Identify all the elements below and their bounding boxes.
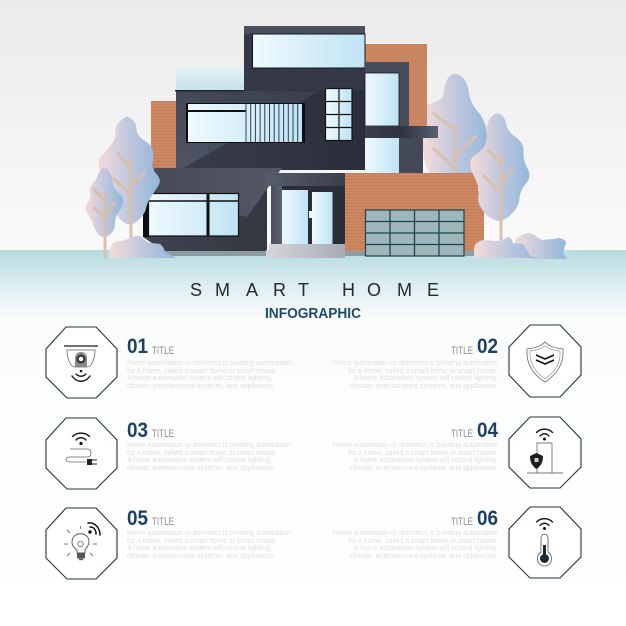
ground band bbox=[0, 250, 626, 320]
description bbox=[127, 442, 291, 472]
tree: back right bbox=[423, 74, 490, 173]
number 04: 04 bbox=[477, 419, 498, 442]
description: for a home, called a smart home or smart house. bbox=[348, 368, 498, 375]
description: A home automation system will control lighting, bbox=[127, 375, 272, 382]
lower right window bbox=[365, 138, 399, 174]
description: Home automation or domotics is building automation bbox=[127, 530, 291, 537]
description: for a home, called a smart home or smart house. bbox=[127, 368, 277, 375]
roof edge bbox=[175, 90, 244, 92]
lower window bbox=[143, 193, 238, 237]
bush: right front bbox=[474, 237, 540, 258]
heading: TITLE bbox=[152, 345, 174, 357]
description: for a home, called a smart home or smart house. bbox=[127, 538, 277, 545]
main storey bbox=[176, 90, 365, 170]
item 01 bbox=[46, 327, 291, 398]
slatted window bbox=[186, 103, 305, 143]
upper right window bbox=[365, 73, 399, 126]
description bbox=[127, 360, 291, 390]
top storey bbox=[244, 26, 365, 96]
roof terrace bbox=[176, 67, 244, 91]
description: Home automation or domotics is building automation bbox=[333, 360, 498, 367]
heading: TITLE bbox=[451, 345, 473, 357]
description: Home automation or domotics is building automation bbox=[333, 442, 498, 449]
subtitle: INFOGRAPHIC bbox=[265, 306, 361, 322]
item 03 bbox=[46, 418, 291, 489]
description: climate, entertainment systems, and appliances. bbox=[350, 465, 498, 472]
lower left block bbox=[143, 168, 282, 252]
description bbox=[333, 530, 498, 560]
item 06 bbox=[333, 507, 581, 578]
heading: TITLE bbox=[152, 516, 174, 528]
porch bbox=[266, 173, 345, 245]
icon: security camera bbox=[46, 327, 117, 398]
right frame bbox=[365, 62, 409, 129]
description: climate, entertainment systems, and appliances. bbox=[127, 553, 275, 560]
description: climate, entertainment systems, and appliances. bbox=[350, 553, 498, 560]
icon: smart bulb bbox=[46, 508, 117, 579]
item 02 bbox=[333, 325, 581, 397]
description bbox=[333, 360, 498, 390]
item 05 bbox=[46, 507, 291, 579]
foundation right bbox=[345, 251, 484, 256]
description: for a home, called a smart home or smart house. bbox=[348, 538, 498, 545]
description: Home automation or domotics is building automation bbox=[333, 530, 498, 537]
item 04 bbox=[333, 417, 581, 488]
lower block light facet bbox=[143, 168, 282, 217]
top storey cap bbox=[244, 26, 365, 34]
icon: wifi lock door bbox=[509, 417, 581, 488]
illustration: house and trees bbox=[85, 26, 567, 259]
description: A home automation system will control lighting, bbox=[354, 545, 498, 552]
description: for a home, called a smart home or smart house. bbox=[127, 450, 277, 457]
description: A home automation system will control lighting, bbox=[354, 457, 498, 464]
icon: wifi plug bbox=[46, 418, 117, 489]
description: climate, entertainment systems, and appliances. bbox=[127, 383, 275, 390]
number 03: 03 bbox=[127, 419, 148, 442]
tree: right bbox=[470, 113, 529, 240]
description: climate, entertainment systems, and appliances. bbox=[350, 383, 498, 390]
tree: left small bbox=[85, 167, 123, 258]
balcony beam bbox=[365, 126, 438, 138]
icon: smart thermometer bbox=[509, 507, 581, 578]
background sky bbox=[0, 0, 626, 251]
foundation bbox=[165, 251, 270, 256]
description: A home automation system will control lighting, bbox=[354, 375, 498, 382]
description bbox=[333, 442, 498, 472]
porch steps bbox=[266, 244, 345, 258]
top window bbox=[252, 34, 365, 68]
lower right column bbox=[399, 136, 423, 174]
main storey light facet bbox=[176, 91, 320, 168]
lower background bbox=[0, 320, 626, 626]
description bbox=[127, 530, 291, 560]
description: A home automation system will control lighting, bbox=[127, 457, 272, 464]
tree: left large bbox=[99, 117, 160, 241]
icon: shield bbox=[509, 325, 581, 397]
description: for a home, called a smart home or smart house. bbox=[348, 450, 498, 457]
brick wall: upper right bbox=[365, 44, 427, 129]
garage door bbox=[366, 210, 464, 256]
description: Home automation or domotics is building automation bbox=[127, 360, 291, 367]
number 01: 01 bbox=[127, 335, 148, 358]
title: SMARTHOME bbox=[190, 280, 439, 300]
number 05: 05 bbox=[127, 507, 148, 530]
heading: TITLE bbox=[451, 516, 473, 528]
description: Home automation or domotics is building automation bbox=[127, 442, 291, 449]
brick wall: upper left bbox=[151, 101, 177, 169]
bush: right back bbox=[515, 233, 567, 259]
number 02: 02 bbox=[477, 335, 498, 358]
garage wall bbox=[345, 173, 484, 256]
heading: TITLE bbox=[451, 428, 473, 440]
number 06: 06 bbox=[477, 507, 498, 530]
description: A home automation system will control lighting, bbox=[127, 545, 272, 552]
bush: left bbox=[110, 236, 176, 258]
grid window bbox=[326, 88, 352, 140]
heading: TITLE bbox=[152, 428, 174, 440]
description: climate, entertainment systems, and appliances. bbox=[127, 465, 275, 472]
